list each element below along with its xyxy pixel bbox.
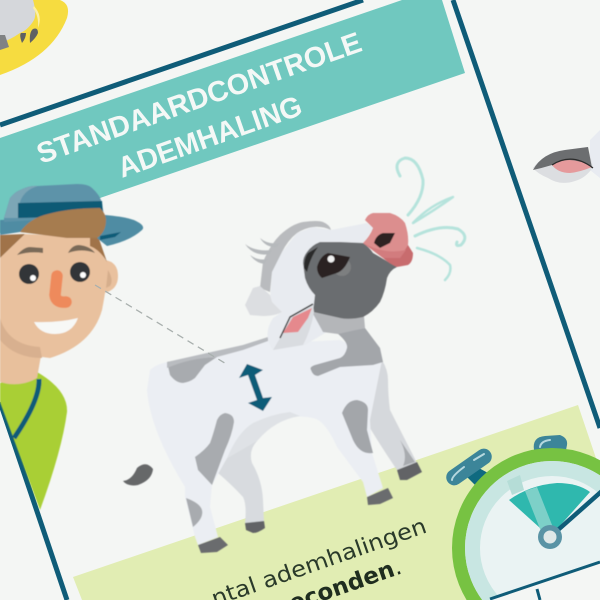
calf tail tuft — [123, 464, 153, 486]
chin shadow — [0, 318, 42, 358]
back spot — [167, 357, 217, 383]
title banner — [0, 0, 465, 233]
smile — [34, 318, 78, 334]
farmer head — [0, 234, 107, 358]
eyebrows — [17, 247, 43, 255]
farmer shirt — [0, 372, 67, 510]
calf far hind leg — [218, 440, 265, 533]
wedge highlight — [525, 487, 556, 539]
panel line below stopwatch — [490, 562, 600, 600]
calf face dark patch — [303, 242, 397, 319]
eyes — [19, 264, 39, 284]
hind leg spot — [186, 498, 202, 527]
hip spot — [195, 413, 234, 485]
calf body — [147, 338, 383, 545]
area below stopwatch — [490, 562, 600, 600]
near hind hoof — [198, 537, 228, 553]
chest spot — [310, 328, 383, 376]
farmer ear — [104, 260, 118, 293]
mane tufts — [245, 238, 280, 264]
stopwatch top button — [534, 435, 567, 450]
breath swirls — [397, 158, 465, 280]
farmer — [0, 184, 143, 510]
calf ear — [273, 304, 314, 350]
neck and poll — [268, 223, 373, 350]
banner title line 1: STANDAARDCONTROLE — [33, 27, 366, 171]
timer wedge — [509, 483, 590, 537]
hair quiff — [20, 208, 106, 238]
banner title line 2: ADEMHALING — [114, 90, 306, 185]
stopwatch — [443, 435, 600, 600]
stopwatch hub — [538, 525, 562, 549]
neck shading — [312, 312, 365, 334]
belly shading — [227, 412, 300, 458]
stopwatch ring — [458, 454, 600, 600]
neighbouring panel: calf on yellow mat — [0, 0, 68, 75]
calf muzzle — [363, 213, 413, 267]
neighbouring panel: ear of cow — [533, 130, 600, 183]
dark eye crescent — [304, 247, 318, 272]
stopwatch side button — [467, 467, 488, 485]
back strip — [167, 337, 268, 368]
hat brim — [0, 215, 143, 246]
hat crown — [4, 184, 104, 222]
hat band — [18, 201, 103, 218]
ring highlight — [507, 475, 524, 495]
observation dashed line — [95, 285, 228, 365]
breathing arrow — [239, 364, 272, 411]
nostril — [374, 233, 395, 248]
nose — [55, 276, 66, 302]
calf — [123, 158, 465, 553]
mane — [260, 221, 331, 292]
calf eye — [317, 253, 351, 278]
foreleg spot — [342, 400, 373, 453]
jaw flap — [245, 286, 282, 316]
near fore hoof — [367, 488, 393, 505]
green instruction panel — [73, 405, 600, 600]
farmer hair sides — [0, 234, 107, 262]
shirt collar — [14, 379, 39, 438]
farmer neck — [0, 340, 42, 384]
calf far foreleg — [367, 360, 422, 480]
stopwatch hand — [550, 491, 600, 537]
